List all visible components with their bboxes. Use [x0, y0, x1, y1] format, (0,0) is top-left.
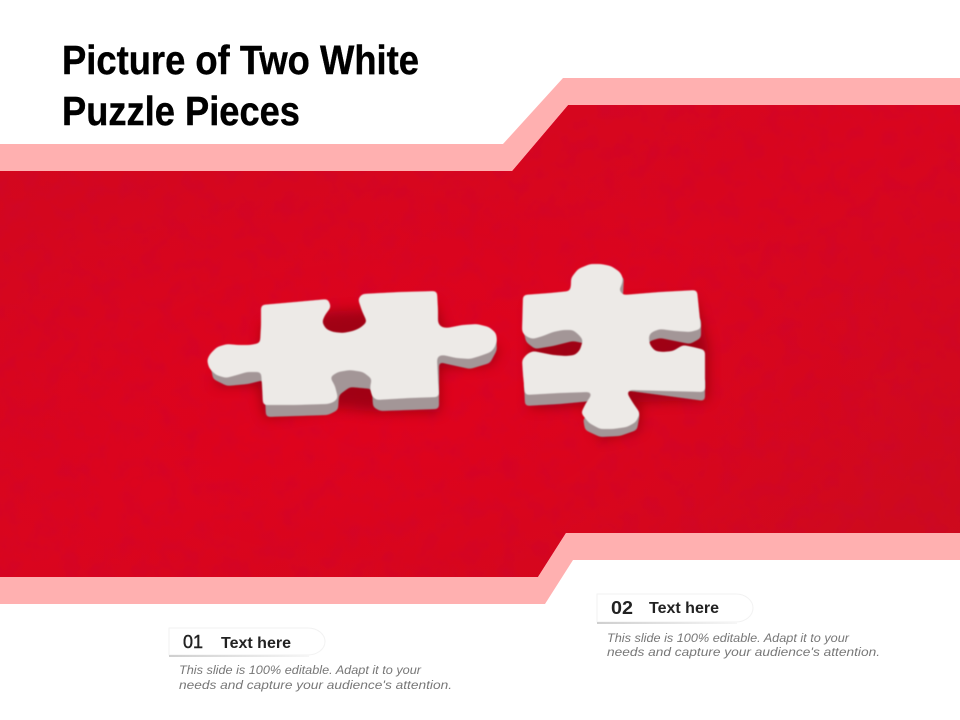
- label pill 02: 02: [611, 598, 633, 618]
- label pill 01: [169, 628, 325, 657]
- label pill 02: [597, 594, 753, 624]
- description 02: needs and capture your audience's attention.: [607, 645, 880, 659]
- bottom pink band: [0, 533, 960, 604]
- label pill 01: Text here: [221, 635, 291, 652]
- callout 01: [169, 628, 452, 692]
- label pill 01: 01: [183, 632, 203, 652]
- callout 02: [597, 594, 880, 659]
- red felt photo background: [0, 105, 960, 577]
- description 02: This slide is 100% editable. Adapt it to your: [607, 631, 850, 645]
- description 01: This slide is 100% editable. Adapt it to your: [179, 663, 422, 677]
- title: Puzzle Pieces: [62, 88, 300, 134]
- puzzle piece right: [522, 264, 708, 440]
- puzzle piece left: [207, 291, 500, 418]
- title: Picture of Two White: [62, 37, 419, 83]
- description 01: needs and capture your audience's attention.: [179, 678, 452, 692]
- label pill 02: Text here: [649, 600, 719, 617]
- top pink band: [0, 78, 960, 171]
- title: [62, 37, 419, 134]
- description 02: [607, 631, 880, 659]
- description 01: [179, 663, 452, 692]
